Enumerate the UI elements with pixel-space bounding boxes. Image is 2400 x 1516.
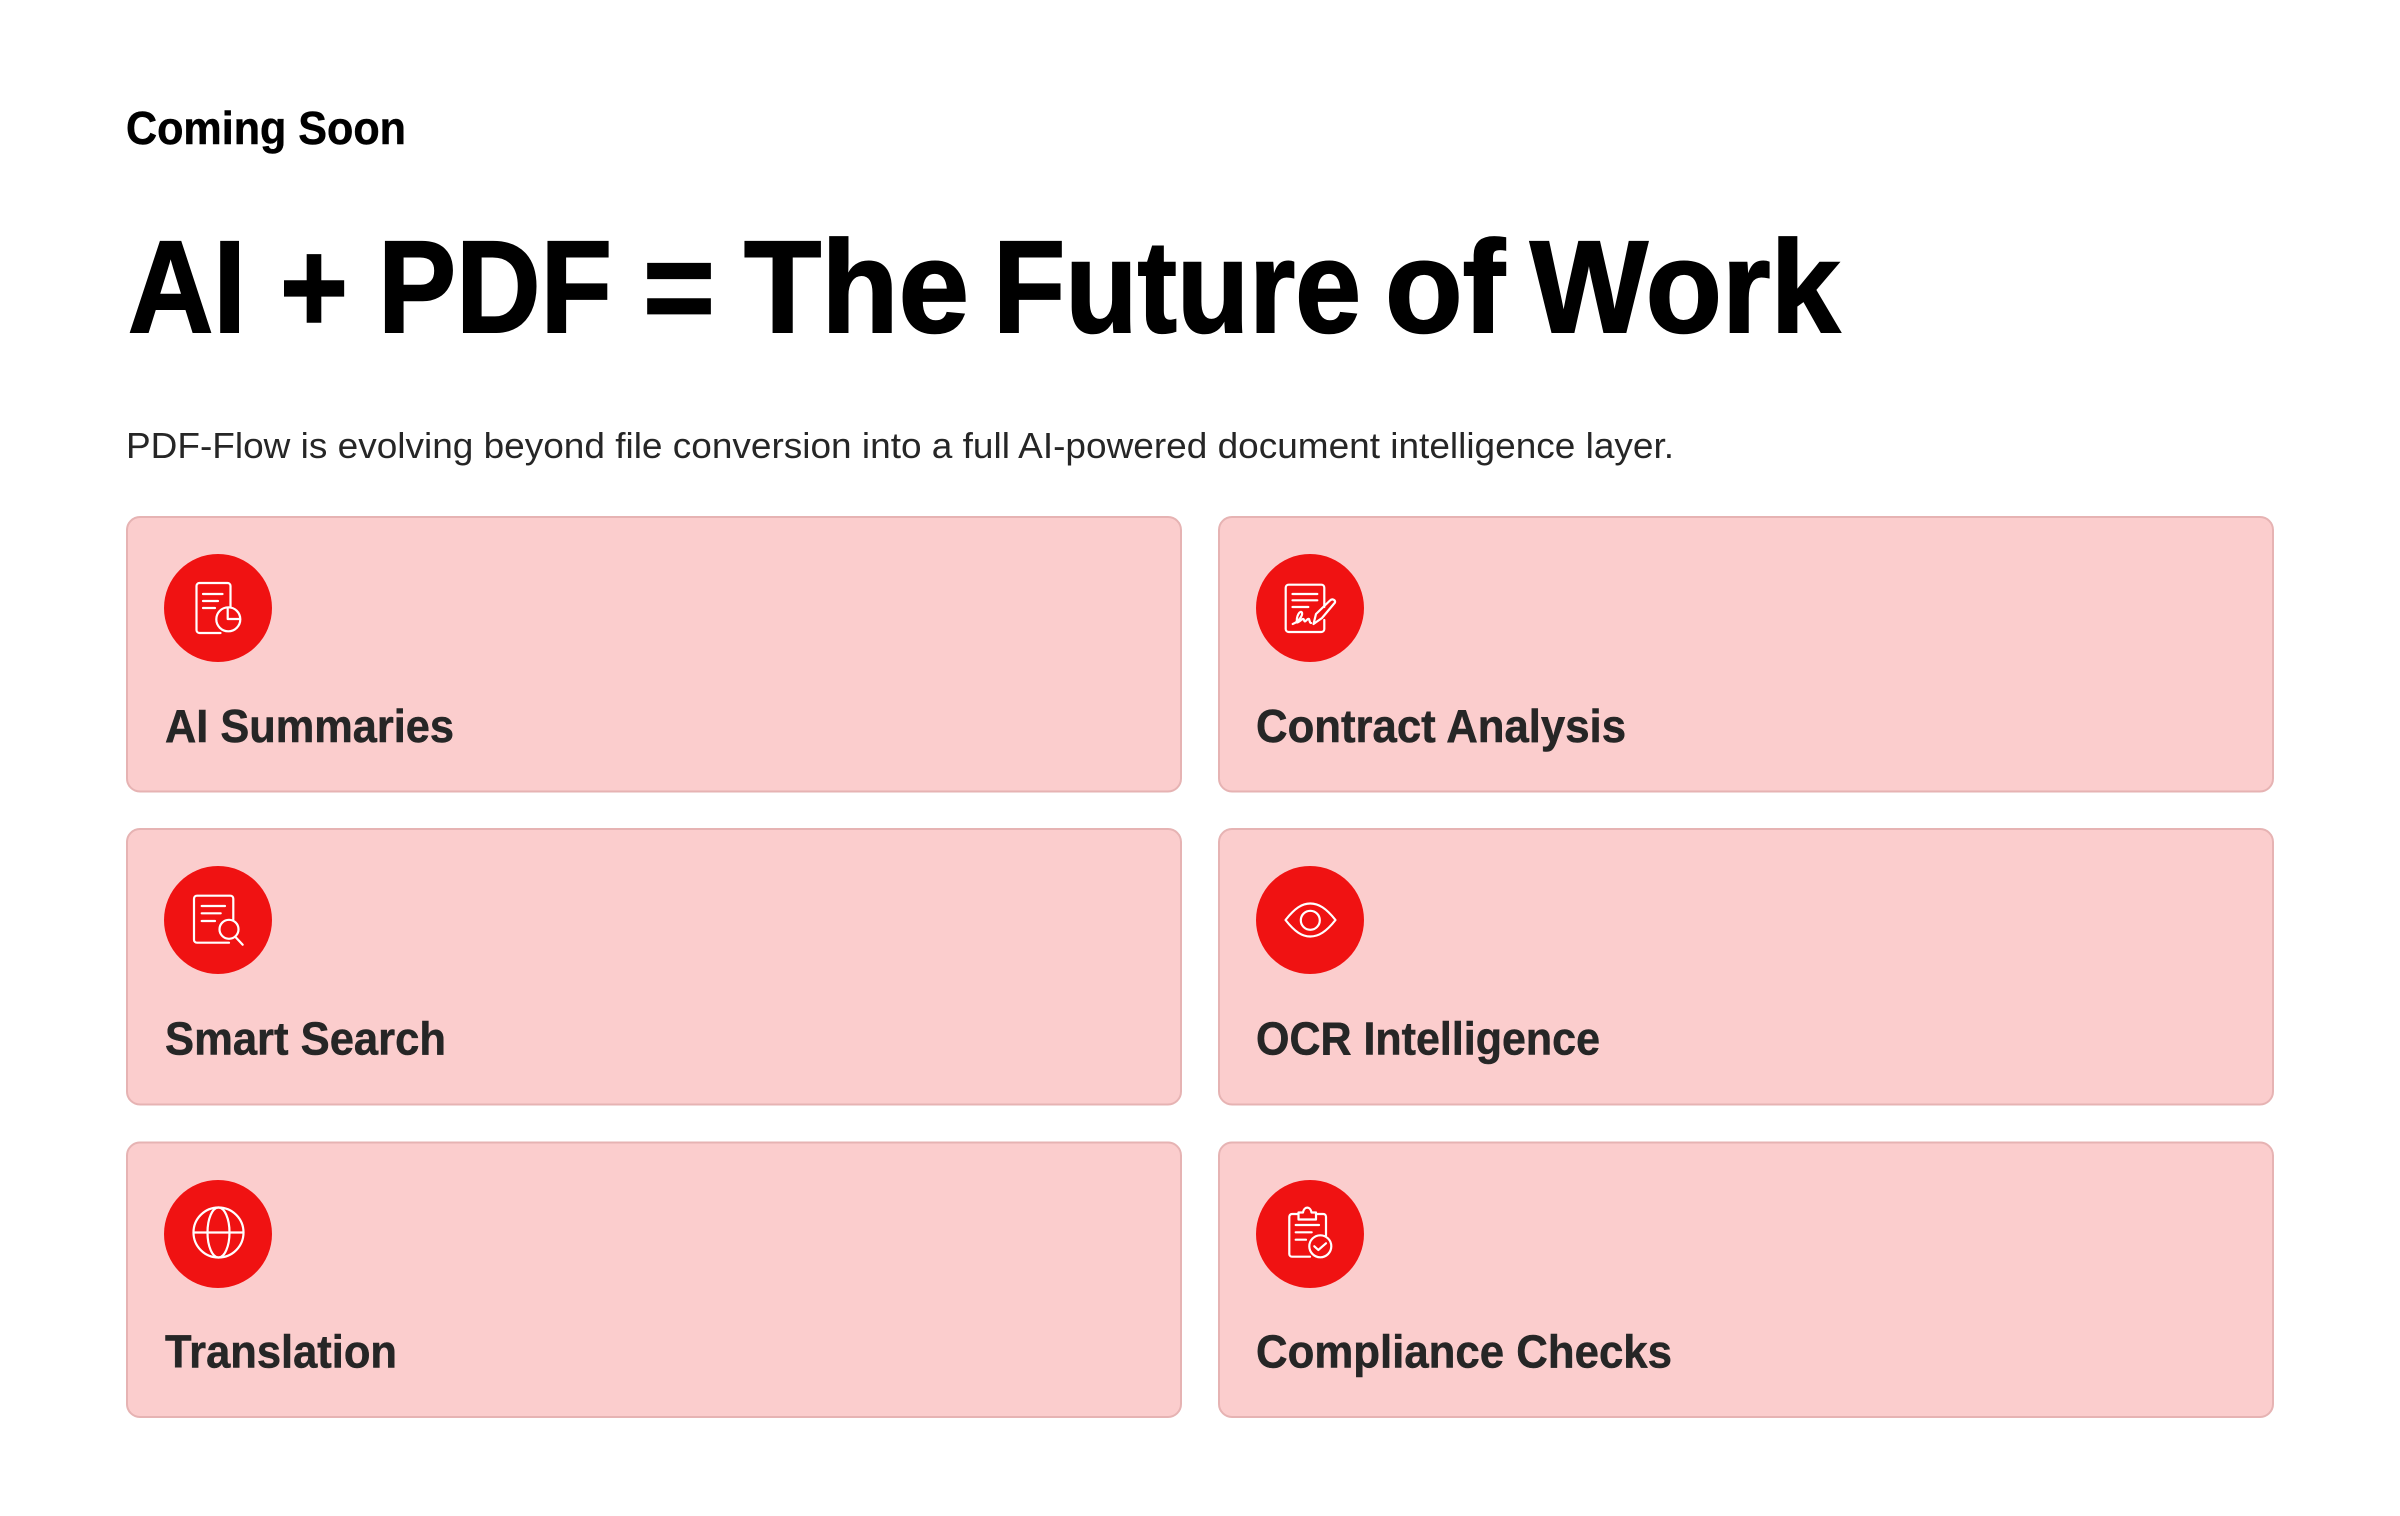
- icon: document with magnifier: [164, 866, 272, 974]
- panel: Contract Analysis: [1219, 517, 2273, 792]
- icon: clipboard with check: [1256, 1180, 1364, 1288]
- panel: AI Summaries: [127, 517, 1181, 792]
- card label: Contract Analysis: [1256, 700, 1626, 752]
- panel: Translation: [127, 1142, 1181, 1417]
- title: The: [744, 213, 969, 360]
- panel: Compliance Checks: [1219, 1142, 2273, 1417]
- card label: Smart Search: [165, 1012, 446, 1064]
- icon: eye: [1256, 866, 1364, 974]
- card label: Translation: [165, 1326, 397, 1378]
- card label: Compliance Checks: [1256, 1326, 1672, 1378]
- title: of: [1385, 213, 1505, 360]
- title: =: [643, 213, 715, 360]
- subtitle: PDF-Flow is evolving beyond file conversion into a full AI-powered document intelligence layer.: [126, 425, 1674, 466]
- eyebrow: Coming Soon: Coming Soon: [126, 102, 406, 154]
- panel: OCR Intelligence: [1219, 829, 2273, 1104]
- card label: AI Summaries: [165, 700, 454, 752]
- card label: OCR Intelligence: [1256, 1012, 1600, 1064]
- title: Work: [1530, 213, 1840, 360]
- panel: Smart Search: [127, 829, 1181, 1104]
- icon: document with pie chart: [164, 554, 272, 662]
- title: +: [280, 213, 348, 360]
- title: Future: [993, 213, 1361, 360]
- icon: signed contract: [1256, 554, 1364, 662]
- title: AI: [128, 213, 246, 360]
- icon: globe: [164, 1180, 272, 1288]
- title: PDF: [378, 213, 612, 360]
